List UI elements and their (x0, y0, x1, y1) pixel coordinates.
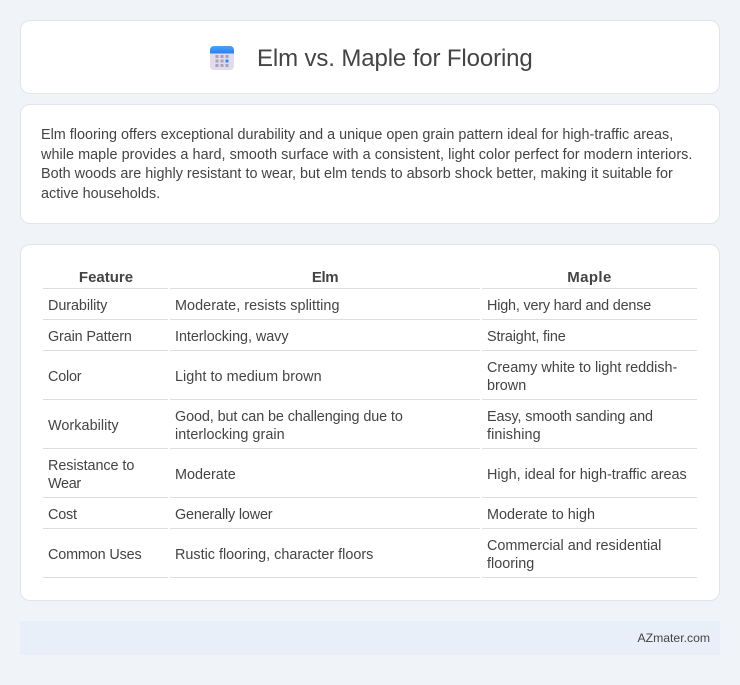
comparison table: Moderate to high (487, 507, 595, 523)
comparison table: Easy, smooth sanding and (487, 409, 653, 425)
comparison table: Grain Pattern (48, 329, 132, 345)
comparison table: High, ideal for high-traffic areas (487, 467, 687, 483)
comparison table: Good, but can be challenging due to (175, 409, 403, 425)
comparison table: Wear (48, 476, 81, 492)
comparison table: Commercial and residential (487, 538, 661, 554)
comparison table: flooring (487, 556, 534, 572)
comparison table: Moderate (175, 467, 236, 483)
comparison table: Rustic flooring, character floors (175, 547, 373, 563)
comparison table: finishing (487, 427, 541, 443)
intro text: active households. (41, 186, 160, 202)
intro text: Both woods are highly resistant to wear, but elm tends to absorb shock better, making it suitable for (41, 166, 673, 182)
comparison table: Moderate, resists splitting (175, 298, 340, 314)
comparison table: brown (487, 378, 526, 394)
comparison table: Resistance to (48, 458, 134, 474)
icon: calendar (210, 46, 234, 70)
comparison table: interlocking grain (175, 427, 285, 443)
comparison table: Durability (48, 298, 107, 314)
comparison table: Workability (48, 418, 119, 434)
comparison table: Maple (567, 269, 612, 286)
comparison table: Light to medium brown (175, 369, 322, 385)
comparison table: Elm (312, 269, 338, 286)
comparison table: Interlocking, wavy (175, 329, 288, 345)
comparison table: Color (48, 369, 81, 385)
heading: Elm vs. Maple for Flooring (257, 45, 533, 72)
intro text: Elm flooring offers exceptional durability and a unique open grain pattern ideal for high-traffic areas, (41, 127, 673, 143)
comparison table: Straight, fine (487, 329, 566, 345)
comparison table: Cost (48, 507, 77, 523)
intro panel (20, 104, 720, 224)
comparison table: Common Uses (48, 547, 142, 563)
title panel (20, 20, 720, 94)
intro text (41, 127, 692, 202)
footer (20, 621, 720, 655)
comparison table: High, very hard and dense (487, 298, 651, 314)
comparison table: Creamy white to light reddish- (487, 360, 677, 376)
comparison table: Generally lower (175, 507, 272, 523)
panel: comparison table (20, 244, 720, 601)
comparison table: Feature (79, 269, 133, 286)
intro text: while maple provides a hard, smooth surface with a consistent, light color perfect for modern interiors. (41, 146, 692, 162)
footer credit: AZmater.com (638, 631, 710, 645)
